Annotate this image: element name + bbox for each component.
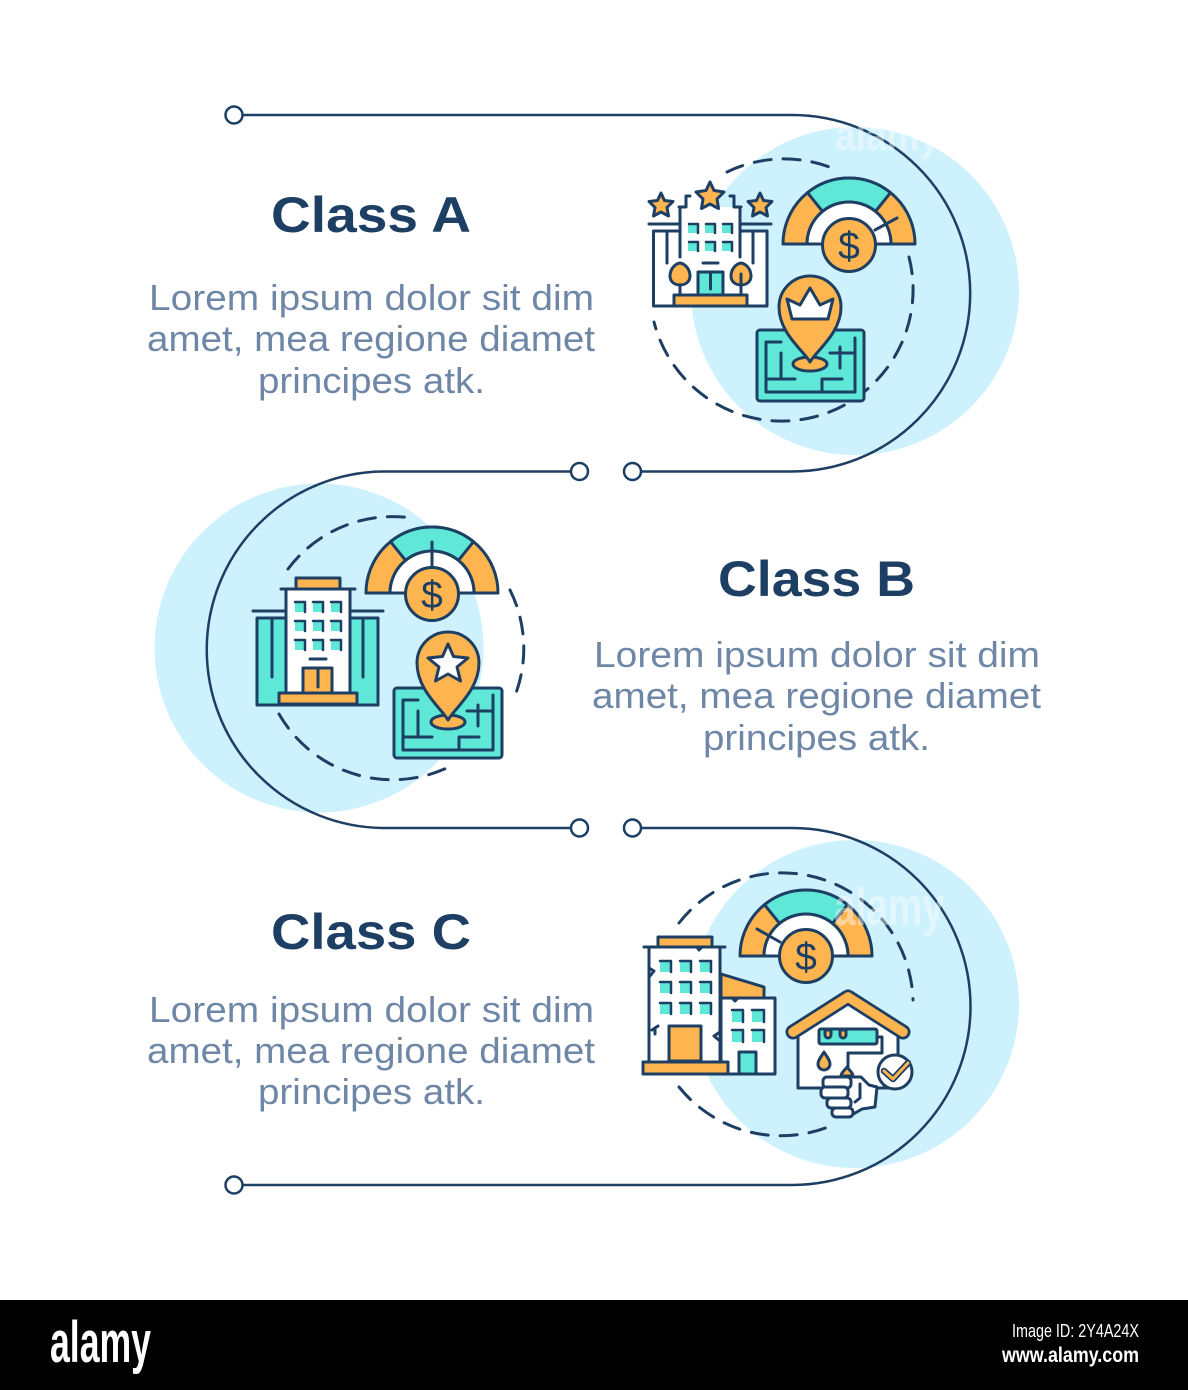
- footer bar: [0, 1300, 1188, 1390]
- text block: class A description: principes atk.: [258, 360, 485, 401]
- watermark: alamy class C: alamy: [834, 877, 944, 937]
- icon: class B office building: [253, 578, 383, 705]
- connector line: class C: [226, 820, 971, 1194]
- footer logo: alamy: [50, 1310, 151, 1375]
- text block: class B description: principes atk.: [703, 717, 930, 758]
- text block: class C description: Lorem ipsum dolor sit dim: [149, 989, 594, 1030]
- dashed ring: class B: [279, 517, 524, 780]
- text block: class A description: Lorem ipsum dolor sit dim: [149, 277, 594, 318]
- text block: class B description: [592, 634, 1041, 758]
- text block: class C description: [147, 989, 595, 1112]
- heading: Class A: Class A: [271, 187, 471, 243]
- heading: Class C: Class C: [271, 904, 471, 960]
- text block: class B description: Lorem ipsum dolor sit dim: [594, 634, 1040, 675]
- dashed ring: class C: [679, 873, 913, 1136]
- icon: class A price gauge: [783, 178, 915, 272]
- icon: class B price gauge: $: [421, 574, 443, 617]
- watermark: alamy class A: alamy: [835, 111, 940, 160]
- icon: class A crown location pin on map: [757, 276, 864, 401]
- icon: class C aging buildings: [643, 937, 775, 1074]
- text block: class B description: amet, mea regione diamet: [592, 675, 1041, 716]
- dashed ring: class A: [654, 159, 913, 421]
- connector line: class A: [226, 106, 970, 480]
- text block: class C description: principes atk.: [258, 1071, 485, 1112]
- text block: class A description: [147, 277, 595, 401]
- icon: class C price gauge: [740, 890, 872, 982]
- icon: class C house being painted: [793, 997, 912, 1117]
- heading: Class B: Class B: [718, 551, 915, 607]
- footer image id: Image ID: 2Y4A24X: [1012, 1321, 1139, 1341]
- panel: class B background circle: [154, 484, 484, 812]
- icon: class C price gauge: $: [795, 936, 817, 979]
- text block: class A description: amet, mea regione diamet: [147, 318, 595, 359]
- icon: class A price gauge: $: [838, 225, 860, 268]
- panel: class C background circle: [691, 840, 1019, 1168]
- text block: class C description: amet, mea regione diamet: [147, 1030, 595, 1071]
- connector line: class B: [207, 463, 588, 836]
- icon: class B price gauge: [366, 527, 498, 620]
- footer url: www.alamy.com: [1001, 1344, 1139, 1367]
- panel: class A background circle: [691, 127, 1019, 455]
- icon: class A five-star hotel: [649, 182, 772, 306]
- icon: class B star location pin on map: [394, 632, 502, 758]
